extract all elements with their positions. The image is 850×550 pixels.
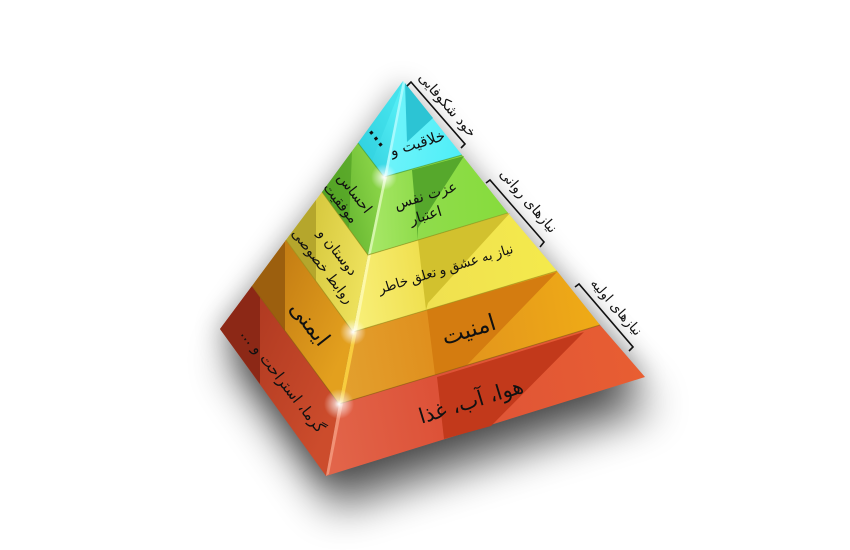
bracket: self-actualization bbox=[407, 70, 479, 148]
label: respect: اعتبار bbox=[407, 204, 444, 229]
label: self-esteem: عزت نفس bbox=[393, 179, 459, 213]
label: security: امنیت bbox=[439, 310, 499, 351]
label: self-actualization: خود شکوفایی bbox=[415, 70, 479, 141]
label: friends and: دوستان و bbox=[313, 225, 360, 279]
label: success: موفقیت bbox=[320, 180, 361, 227]
label: love and belonging: نیاز به عشق و تعلق خاطر bbox=[375, 241, 515, 298]
label: warmth and rest: گرما، استراحت و ... bbox=[237, 326, 329, 437]
tier separator lines bbox=[252, 143, 600, 404]
tier: cyan capstone bbox=[358, 81, 462, 177]
left face labels bbox=[237, 122, 394, 437]
junction glows bbox=[324, 164, 397, 419]
bracket: basic needs bbox=[575, 276, 645, 351]
tier: orange bbox=[252, 240, 600, 404]
bracket: psychological needs bbox=[486, 166, 560, 247]
label: feeling of: احساس bbox=[334, 170, 375, 217]
pyramid bbox=[220, 81, 645, 476]
label: dots: ... bbox=[364, 122, 394, 152]
label: safety: ایمنی bbox=[284, 297, 334, 351]
label: creativity: خلاقیت و bbox=[387, 126, 447, 160]
drop shadow bbox=[219, 83, 654, 509]
tier: green bbox=[322, 143, 508, 255]
tier: red base bbox=[220, 286, 645, 476]
tier: yellow bbox=[286, 192, 557, 332]
label: private relations: روابط خصوصی bbox=[288, 226, 356, 307]
label: basic needs: نیازهای اولیه bbox=[587, 276, 645, 339]
label: psychological needs: نیازهای روانی bbox=[496, 166, 560, 237]
right face labels bbox=[375, 126, 526, 429]
label: air, water, food: هوا، آب، غذا bbox=[415, 373, 526, 429]
